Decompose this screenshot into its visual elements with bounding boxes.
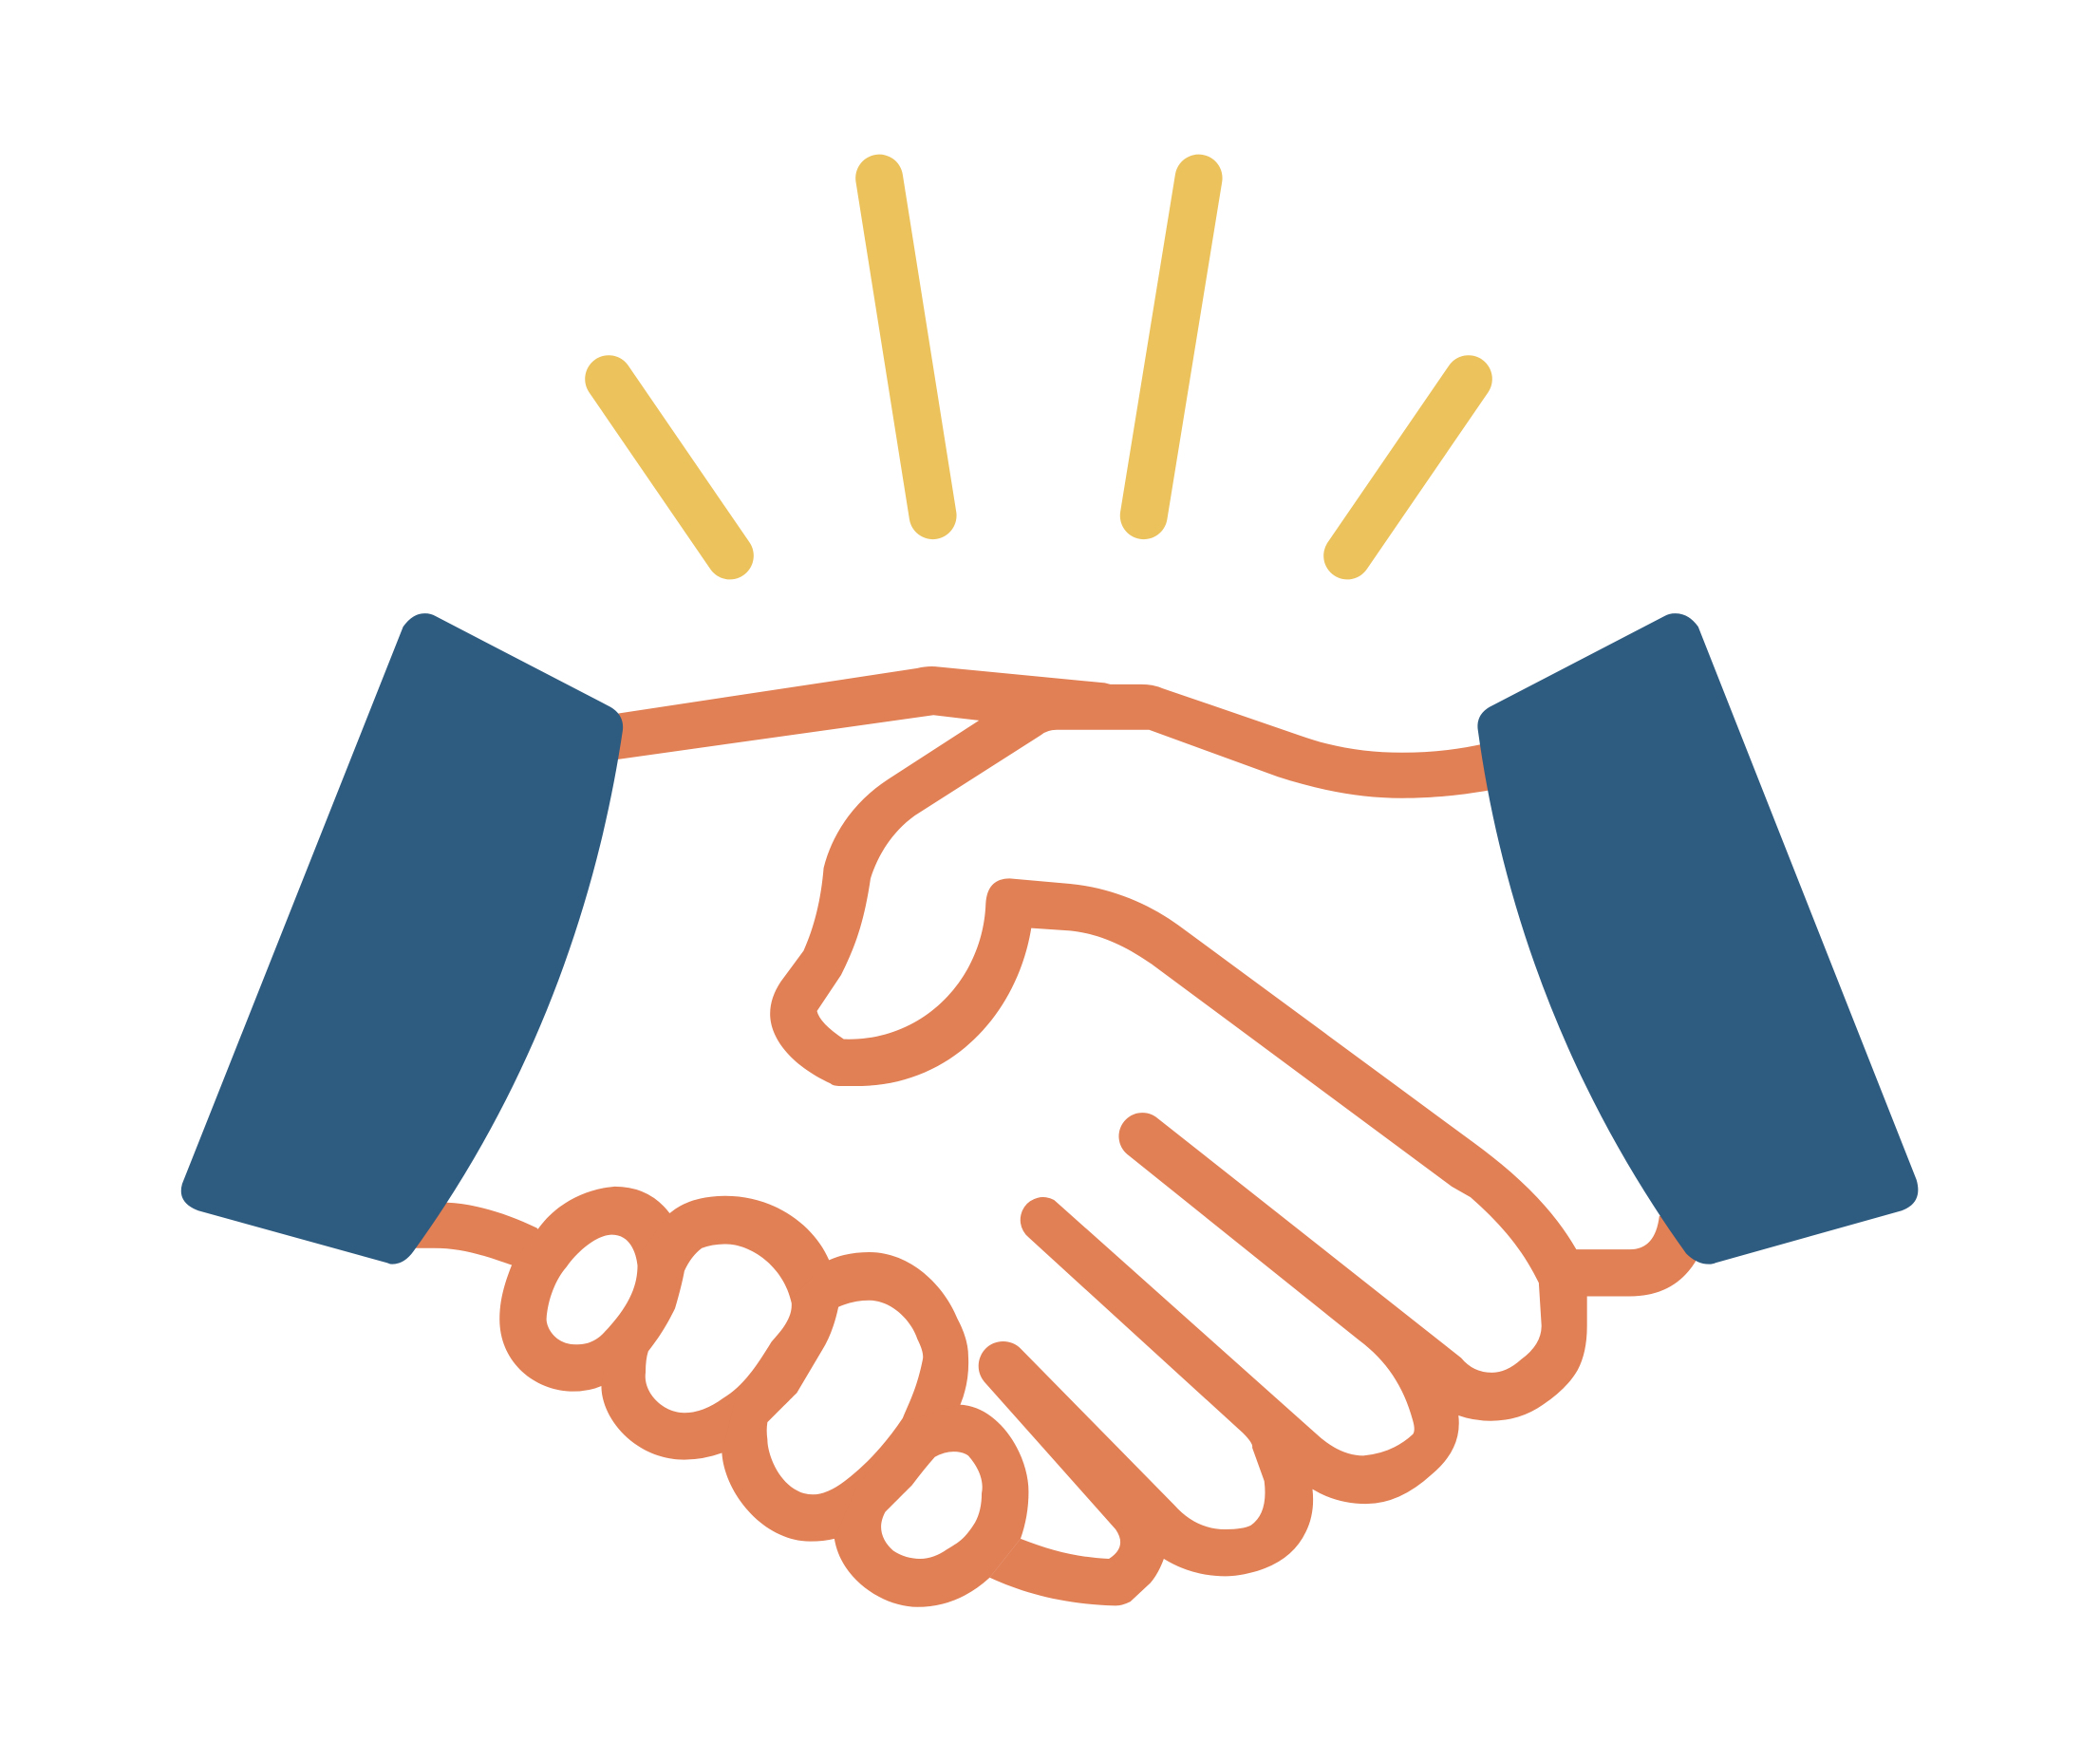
finger 2 interior — [646, 1244, 792, 1413]
finger 3 interior — [767, 1301, 923, 1494]
finger 1 outline — [499, 1187, 697, 1392]
finger 3 outline — [722, 1252, 968, 1542]
ray: far left — [609, 379, 730, 555]
right hand and forearm outline — [590, 666, 1701, 1605]
finger 4 outline — [834, 1405, 1028, 1607]
sparkle rays — [609, 178, 1469, 555]
left wrist line — [408, 1203, 549, 1275]
ray: far right — [1347, 379, 1469, 555]
finger 2 outline — [601, 1196, 857, 1460]
finger 4 interior — [881, 1452, 983, 1559]
finger 1 interior — [547, 1235, 638, 1344]
ray: top right — [1144, 178, 1199, 515]
ray: top left — [879, 178, 933, 515]
right blue cuff — [1477, 613, 1918, 1265]
left blue cuff — [181, 613, 623, 1265]
left hand fingers — [499, 1187, 1028, 1607]
